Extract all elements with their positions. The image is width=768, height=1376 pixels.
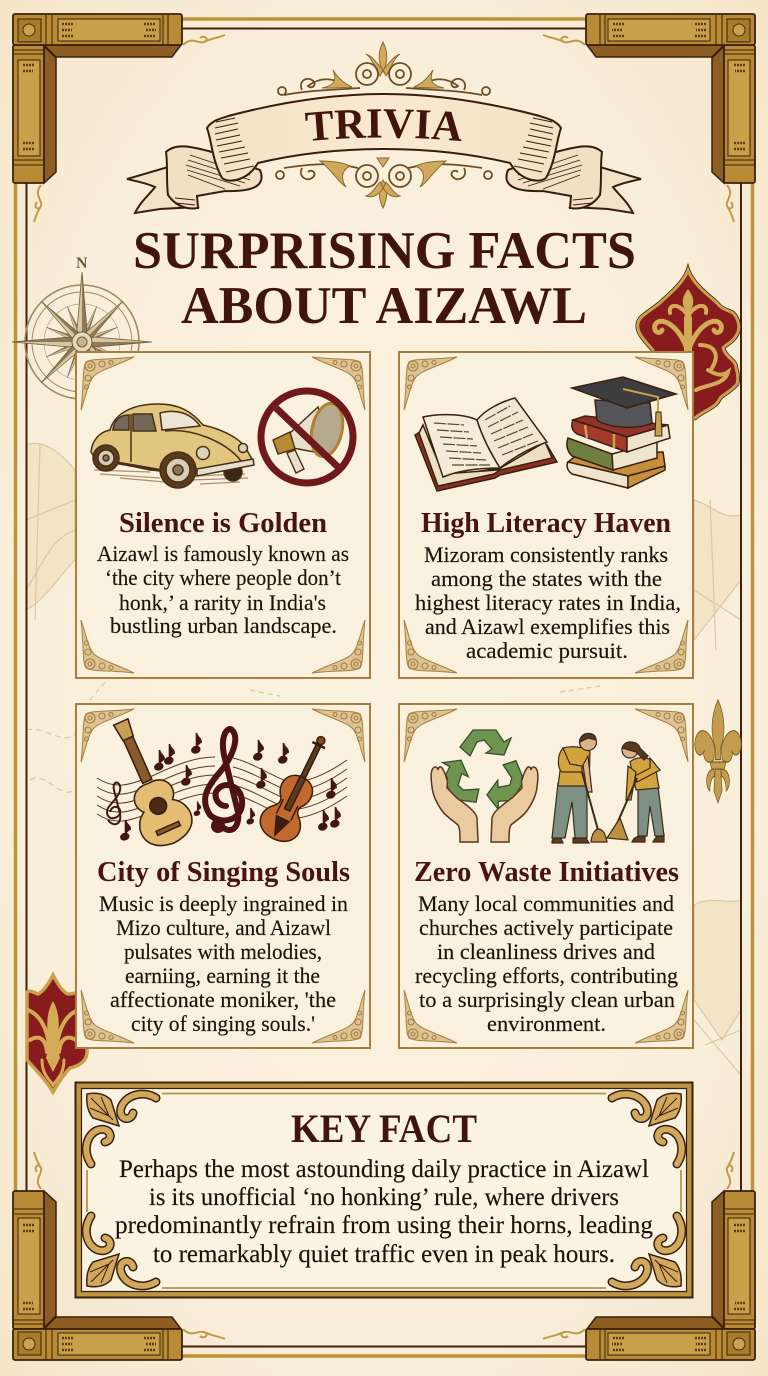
main title: ABOUT AIZAWL — [181, 277, 587, 335]
icon: recycle symbol — [436, 730, 531, 813]
icon: book stack and graduation cap — [567, 377, 676, 488]
heading: Zero Waste Initiatives — [414, 856, 679, 888]
map background — [26, 443, 741, 1075]
body text: and Aizawl exemplifies this — [425, 614, 670, 639]
panel: Zero Waste Initiatives — [399, 704, 693, 1048]
compass rose: N — [76, 255, 88, 272]
icon: violin — [255, 728, 341, 848]
compass rose — [12, 255, 152, 412]
red shield with gold fleur, right — [638, 270, 739, 418]
corner ornaments — [86, 1093, 682, 1287]
heading: City of Singing Souls — [97, 856, 350, 888]
body text — [415, 542, 681, 663]
body text: ‘the city where people don’t — [105, 565, 341, 590]
body text: churches actively participate — [419, 915, 673, 940]
body text — [97, 541, 349, 638]
body text: Aizawl is famously known as — [97, 541, 349, 566]
body text: among the states with the — [431, 566, 662, 591]
body text: pulsates with melodies, — [124, 939, 322, 964]
body text: academic pursuit. — [466, 638, 628, 663]
corner book: bottom left — [13, 1152, 225, 1360]
panel: High Literacy Haven — [399, 352, 693, 678]
heading: High Literacy Haven — [421, 507, 671, 539]
ribbon main band — [207, 94, 561, 181]
corner book: top left — [13, 14, 225, 222]
body text — [99, 891, 348, 1036]
body text: Many local communities and — [418, 891, 674, 916]
body text: environment. — [487, 1011, 606, 1036]
body text: to a surprisingly clean urban — [419, 987, 675, 1012]
panel: City of Singing Souls — [76, 704, 370, 1048]
key fact text: predominantly refrain from using their horns, leading — [115, 1212, 653, 1239]
heading: Silence is Golden — [119, 507, 327, 539]
body text: Music is deeply ingrained in — [99, 891, 348, 916]
main title — [133, 222, 636, 335]
ribbon tail right — [506, 146, 641, 213]
banner ribbon with title — [126, 93, 642, 214]
bottom book — [567, 452, 665, 488]
body text: Mizo culture, and Aizawl — [116, 915, 331, 940]
gold fleur, right — [695, 700, 741, 803]
icon: open book — [415, 398, 557, 491]
icon: acoustic guitar — [96, 711, 199, 854]
body text: bustling urban landscape. — [110, 613, 337, 638]
icon: man sweeping — [552, 733, 607, 843]
icon: woman sweeping — [607, 742, 664, 842]
body text: recycling efforts, contributing — [415, 963, 678, 988]
body text: highest literacy rates in India, — [415, 590, 681, 615]
icon: treble clef — [205, 729, 242, 833]
body text — [415, 891, 678, 1036]
icon: music staff and notes — [97, 733, 347, 840]
green book — [567, 438, 657, 470]
key fact text: is its unofficial ‘no honking’ rule, where drivers — [149, 1184, 619, 1211]
main title: SURPRISING FACTS — [133, 222, 636, 280]
key fact text: Perhaps the most astounding daily practice in Aizawl — [119, 1156, 649, 1183]
body text: earniing, earning it the — [125, 963, 320, 988]
top flourish above banner — [278, 42, 490, 95]
corner book: bottom right — [543, 1152, 755, 1360]
body text: in cleanliness drives and — [437, 939, 655, 964]
corner book: top right — [543, 14, 755, 222]
bottom flourish below banner — [276, 158, 492, 208]
body text: city of singing souls.' — [131, 1011, 315, 1036]
key fact heading: KEY FACT — [291, 1106, 477, 1151]
graduation cap — [572, 377, 676, 436]
red book — [572, 416, 670, 452]
panel: Silence is Golden — [76, 352, 370, 678]
key fact text: to remarkably quiet traffic even in peak hours. — [153, 1241, 615, 1268]
icon: cupped hands — [431, 767, 538, 842]
panel: key fact — [76, 1082, 692, 1298]
body text: honk,’ a rarity in India's — [119, 590, 326, 615]
body text: Mizoram consistently ranks — [424, 542, 668, 567]
ribbon tail left — [127, 146, 262, 213]
key fact text — [115, 1156, 653, 1268]
icon: vintage car — [91, 404, 254, 488]
banner title: TRIVIA — [304, 109, 462, 142]
body text: affectionate moniker, 'the — [110, 987, 336, 1012]
icon: no megaphone — [261, 391, 353, 483]
red shield with gold fleur, left — [27, 975, 87, 1092]
